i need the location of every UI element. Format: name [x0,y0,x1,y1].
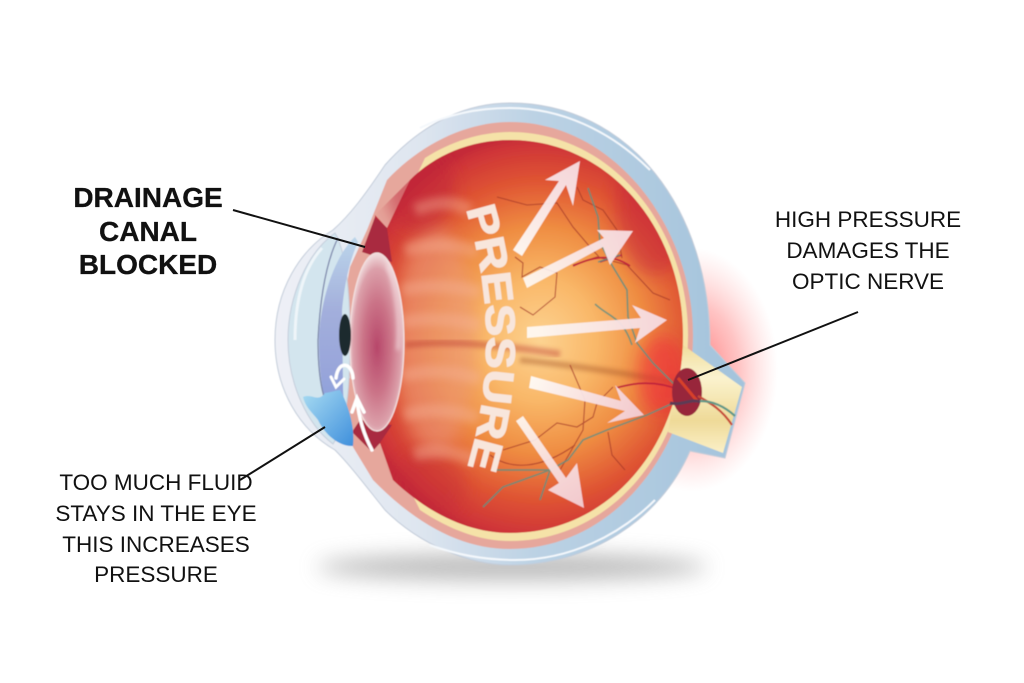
heading: drainage canal blocked: CANAL [99,216,197,247]
arrow 3 [527,305,667,343]
text: too much fluid: PRESSURE [94,562,218,587]
fluid flow arrows [331,365,372,450]
sclera outer layer [275,103,745,565]
PRESSURE curved path [466,209,486,472]
retinal blood vessels [483,187,684,507]
PRESSURE text: PRESSURE [466,203,516,473]
callout leader: drainage canal [233,210,365,247]
arrow 1 [513,161,580,256]
dark wedges behind the lens [352,217,392,452]
pressure arrows [513,161,667,508]
lens [350,253,404,431]
text: too much fluid: THIS INCREASES [62,532,250,557]
heading: drainage canal blocked: BLOCKED [79,249,217,280]
callout leader: fluid [240,427,325,480]
text: high pressure damages the optic nerve: OPTIC NERVE [792,269,944,294]
nerve vessels [698,396,735,425]
callout leader: optic nerve [688,312,858,380]
text: too much fluid: TOO MUCH FLUID [59,470,253,495]
arrow 5 [516,416,584,508]
heading: drainage canal blocked: DRAINAGE [73,182,223,213]
retina interior [375,140,683,533]
text: too much fluid: STAYS IN THE EYE [55,501,257,526]
choroid and iris salmon layer [342,122,693,549]
pupil [339,314,351,356]
eye cross-section [274,102,746,566]
iris [319,237,358,445]
text: high pressure damages the optic nerve: DAMAGES THE [786,238,950,263]
iris edge line [318,238,338,400]
red glow around optic nerve [606,248,778,492]
optic nerve [668,345,742,453]
ciliary folds and central band [386,135,693,519]
optic disc [670,368,702,416]
cornea inner layer [288,233,350,444]
sclera highlight [420,108,655,560]
arrow 4 [529,376,644,423]
ground shadow [317,554,707,580]
arrow 2 [523,230,633,288]
text: high pressure damages the optic nerve: HIGH PRESSURE [775,207,961,232]
infographic canvas [56,102,960,592]
blue fluid buildup [303,390,353,446]
lens highlight [388,265,399,350]
retina cream layer [405,132,688,541]
cornea highlight [295,248,322,340]
